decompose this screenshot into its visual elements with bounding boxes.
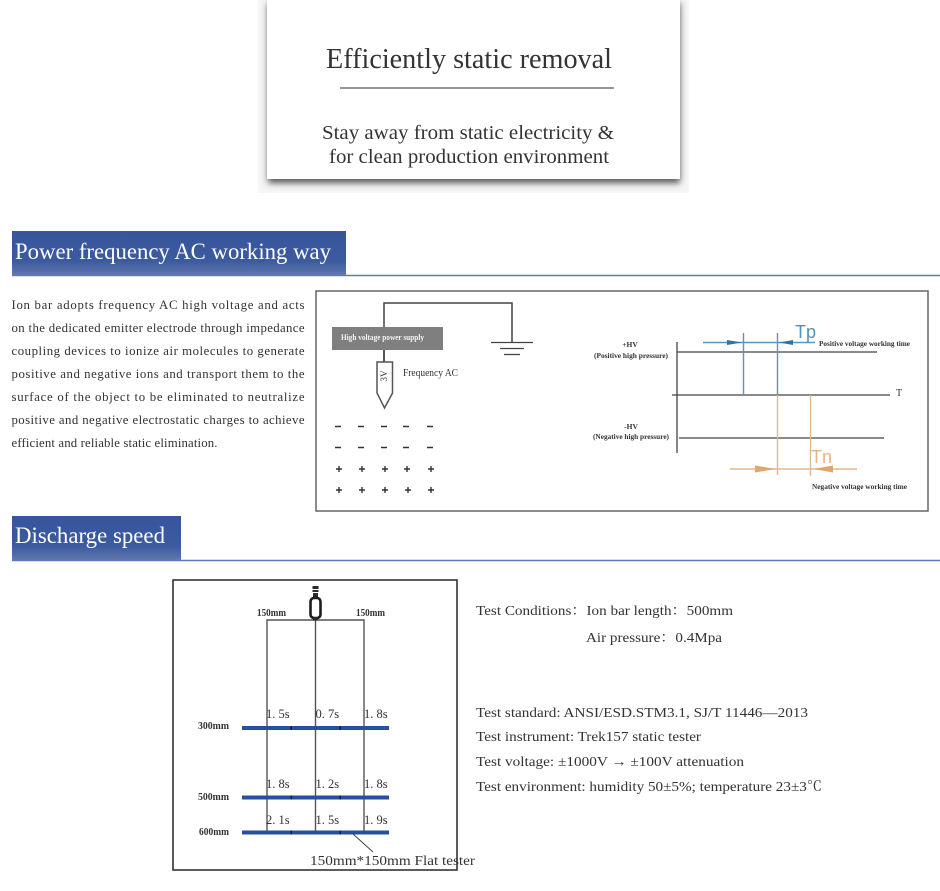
- ion symbols: [335, 426, 434, 493]
- discharge times: 1. 8s: [364, 777, 388, 791]
- voltage waveform chart: Tn: [811, 447, 832, 467]
- power supply and ground circuit: High voltage power supply: [341, 333, 424, 342]
- discharge times: 1. 8s: [266, 777, 290, 791]
- panel: working principle diagram: [316, 291, 928, 511]
- description text block: positive and negative electrostatic charges to achieve: [12, 413, 305, 427]
- distance labels: 150mm: [356, 608, 385, 619]
- tester bars: [242, 726, 389, 834]
- description text block: positive and negative ions and transport them to the: [12, 367, 305, 381]
- title: Efficiently static removal: [326, 44, 612, 75]
- callout: flat tester: [310, 834, 475, 869]
- distance labels: 600mm: [199, 827, 229, 838]
- voltage waveform chart: +HV: [622, 340, 638, 349]
- distance labels: 150mm: [257, 608, 286, 619]
- discharge times: 1. 8s: [364, 707, 388, 721]
- test conditions text: Test instrument: Trek157 static tester: [476, 730, 701, 745]
- emitter electrode: 3V: [379, 370, 389, 382]
- description text block: [12, 298, 305, 450]
- discharge times: 2. 1s: [266, 813, 290, 827]
- power supply and ground circuit: [332, 303, 533, 362]
- distance labels: 500mm: [198, 792, 229, 803]
- discharge times: 1. 2s: [316, 777, 339, 791]
- emitter electrode: [377, 362, 392, 408]
- heading: power frequency AC working way: [12, 231, 940, 276]
- test conditions text: Test voltage: ±1000V → ±100V attenuation: [476, 755, 744, 770]
- test conditions text: Test standard: ANSI/ESD.STM3.1, SJ/T 11446—2013: [476, 706, 808, 721]
- subtitle: Stay away from static electricity &: [322, 122, 614, 144]
- heading: discharge speed: [12, 516, 940, 560]
- voltage waveform chart: (Negative high pressure): [593, 432, 669, 441]
- discharge times: 1. 5s: [316, 813, 339, 827]
- description text block: Ion bar adopts frequency AC high voltage and acts: [12, 298, 305, 312]
- heading: discharge speed: Discharge speed: [15, 523, 165, 548]
- test conditions text: [476, 604, 822, 795]
- voltage waveform chart: Tp: [795, 322, 816, 342]
- voltage waveform chart: Positive voltage working time: [819, 339, 911, 348]
- discharge times: 1. 5s: [266, 707, 290, 721]
- label: frequency AC: Frequency AC: [403, 368, 458, 379]
- test conditions text: Test environment: humidity 50±5%; temperature 23±3℃: [476, 780, 822, 795]
- distance labels: [198, 608, 385, 838]
- subtitle: for clean production environment: [329, 146, 609, 168]
- description text block: coupling devices to ionize air molecules to generate: [12, 344, 305, 358]
- arrow: Tp: [727, 340, 793, 345]
- test conditions text: Test Conditions：Ion bar length：500mm: [476, 604, 733, 619]
- subtitle: [322, 122, 614, 168]
- test frame lines: [267, 620, 364, 832]
- voltage waveform chart: [593, 322, 911, 491]
- description text block: on the dedicated emitter electrode through impedance: [12, 321, 305, 335]
- discharge times: 1. 9s: [364, 813, 388, 827]
- heading: power frequency AC working way: Power frequency AC working way: [15, 239, 331, 264]
- description text block: efficient and reliable static elimination.: [12, 436, 218, 450]
- voltage waveform chart: (Positive high pressure): [594, 351, 668, 360]
- voltage waveform chart: T: [896, 388, 902, 399]
- description text block: surface of the object to be eliminated to neutralize: [12, 390, 305, 404]
- panel: discharge test diagram: [173, 580, 475, 870]
- voltage waveform chart: -HV: [624, 422, 638, 431]
- title card: [258, 0, 689, 193]
- discharge times: [266, 707, 388, 827]
- voltage waveform chart: Negative voltage working time: [812, 482, 908, 491]
- callout: flat tester: 150mm*150mm Flat tester: [310, 854, 475, 869]
- distance labels: 300mm: [198, 721, 229, 732]
- icon: ion bar nozzle: [310, 586, 320, 620]
- discharge times: 0. 7s: [316, 707, 339, 721]
- test conditions text: Air pressure：0.4Mpa: [586, 631, 723, 646]
- arrow: Tn: [755, 466, 833, 472]
